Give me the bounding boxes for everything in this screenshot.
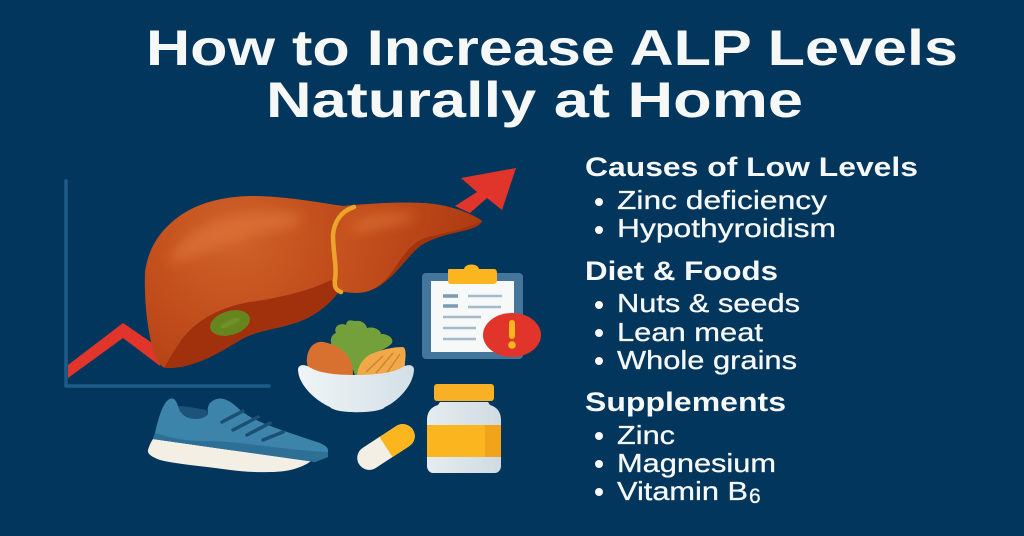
- section: diet and foods: Diet & Foods: [585, 256, 778, 286]
- section: supplements: 6: [749, 485, 761, 508]
- section: supplements: Magnesium: [617, 448, 776, 478]
- capsule pill: [353, 420, 419, 474]
- section: supplements: Zinc: [617, 420, 675, 450]
- gallbladder: [207, 306, 253, 340]
- title: [146, 20, 958, 128]
- supplement bottle: [427, 384, 501, 473]
- clip: [448, 264, 497, 284]
- right lobe: [334, 203, 482, 293]
- clipboard lines: [443, 296, 502, 339]
- clipboard icon: [422, 264, 541, 359]
- liver shaded underside: [164, 280, 340, 368]
- upper: [153, 398, 328, 462]
- bowl body: [298, 365, 414, 412]
- section: diet and foods: Nuts & seeds: [617, 288, 800, 318]
- section: diet and foods: Whole grains: [617, 345, 797, 375]
- brown nut: [307, 342, 353, 376]
- section: supplements: Vitamin B: [617, 476, 748, 506]
- almond: [357, 347, 406, 376]
- title: Naturally at Home: [266, 72, 803, 128]
- bottle cap: [434, 384, 494, 401]
- section: causes of low levels: Zinc deficiency: [617, 185, 827, 215]
- liver: [145, 196, 482, 368]
- text panel: [585, 152, 918, 508]
- food bowl: [298, 320, 414, 412]
- section: causes of low levels: [585, 152, 918, 243]
- section: diet and foods: [585, 256, 800, 375]
- laces: [222, 411, 283, 440]
- chart axes: [66, 181, 269, 386]
- sole: [148, 439, 315, 472]
- ligament: [333, 207, 354, 292]
- running shoe: [148, 398, 328, 472]
- section: supplements: [585, 387, 786, 508]
- section: supplements: Supplements: [585, 387, 786, 417]
- red trend arrow: [68, 168, 516, 378]
- greens: [331, 320, 392, 376]
- section: causes of low levels: Causes of Low Levels: [585, 152, 918, 182]
- alert badge: [483, 313, 541, 357]
- section: diet and foods: Lean meat: [617, 317, 764, 347]
- title: How to Increase ALP Levels: [146, 20, 958, 76]
- liver highlights: [170, 212, 301, 263]
- section: causes of low levels: Hypothyroidism: [617, 213, 836, 243]
